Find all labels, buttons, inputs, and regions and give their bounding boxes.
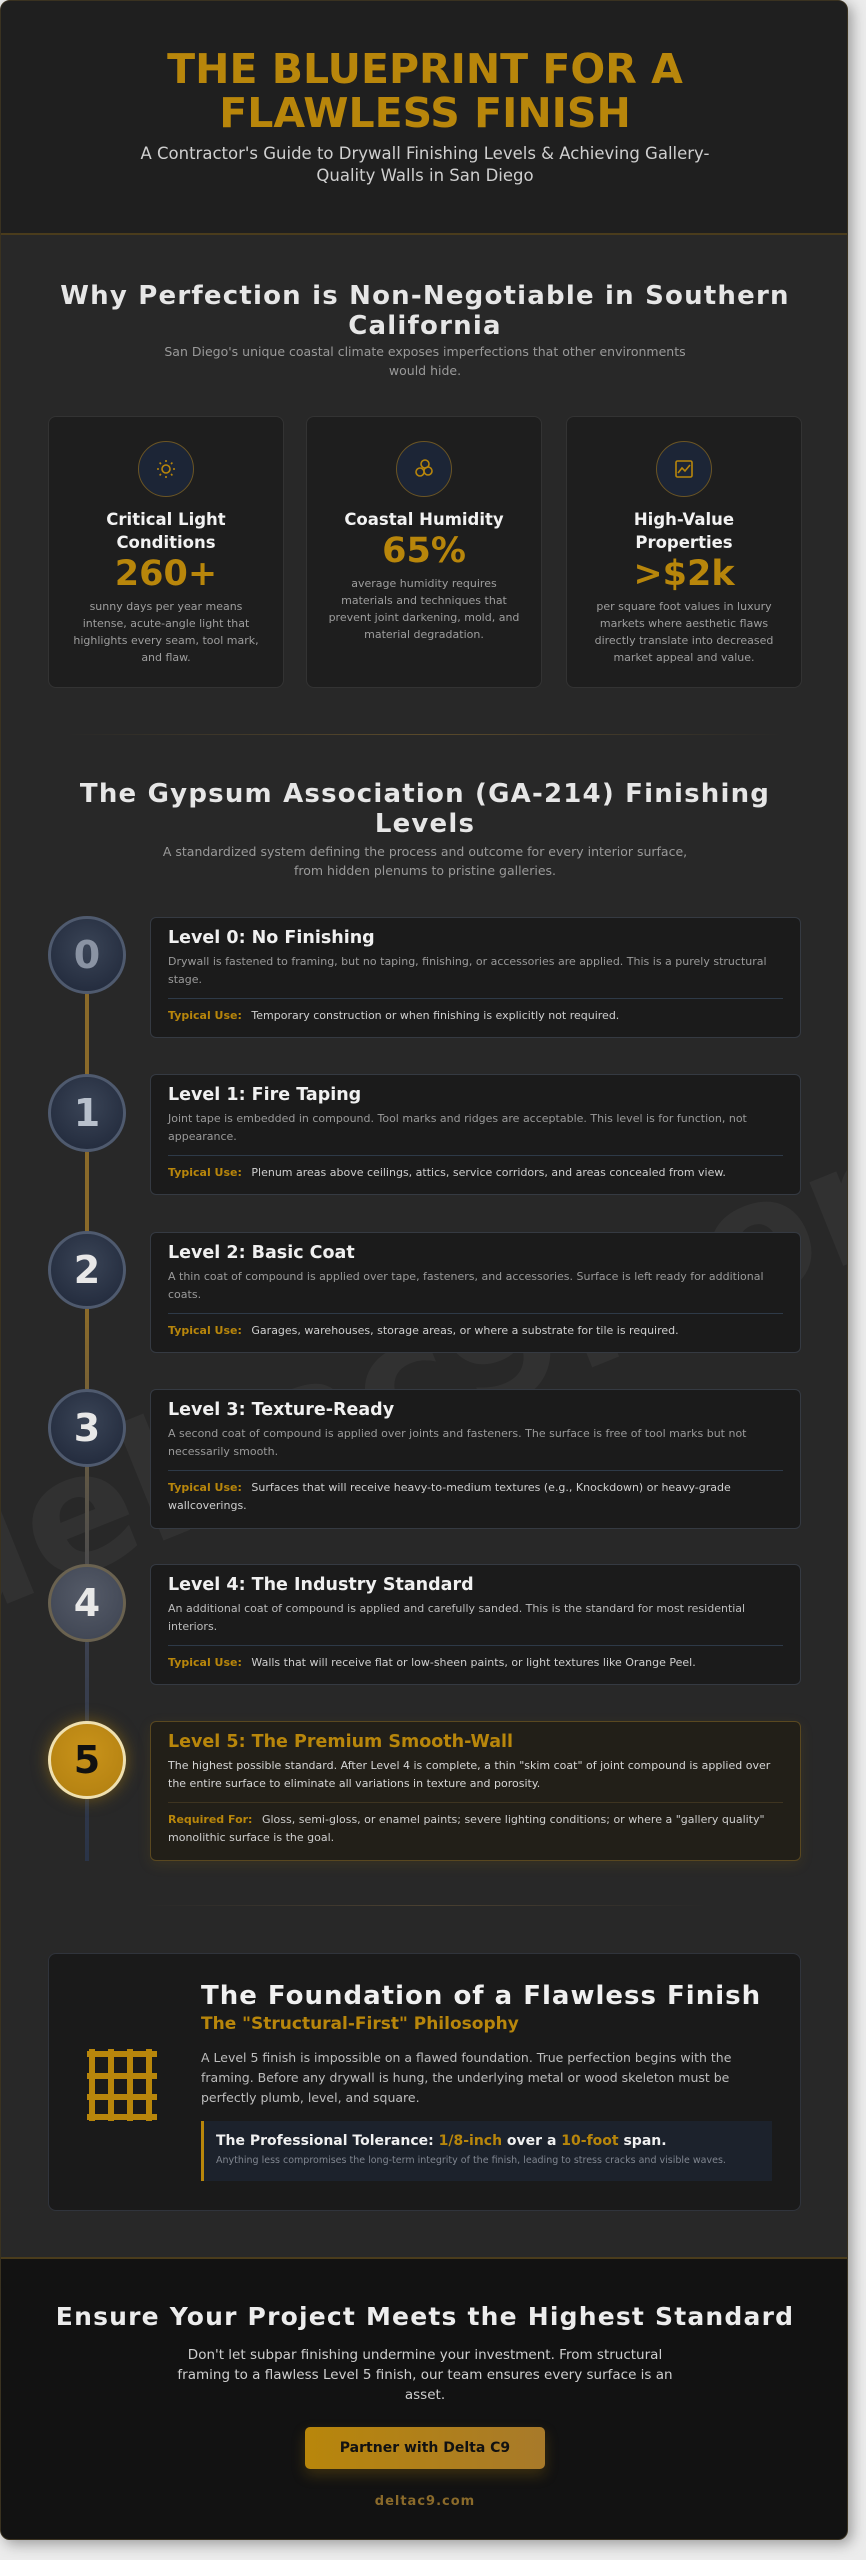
level 5 card: [150, 1721, 801, 1861]
heading: GA-214: The Gypsum Association (GA-214) Finishing Levels: [80, 779, 770, 839]
foundation subheading: The "Structural-First" Philosophy: [201, 2014, 519, 2034]
icon: chart: [656, 441, 712, 497]
level 0 marker: [48, 916, 126, 994]
level 4 card: Typical Use: Walls that will receive flat or low-sheen paints, or light textures like Orange Peel.: [168, 1656, 696, 1669]
card: high-value: [566, 416, 802, 688]
card: high-value: per square foot values in luxury markets where aesthetic flaws directly translate into decreased market appeal and value.: [595, 600, 773, 664]
CTA button: Partner with Delta C9: [340, 2440, 510, 2456]
level 2 marker: 2: [74, 1248, 100, 1292]
subtitle: A Contractor's Guide to Drywall Finishing Levels & Achieving Gallery-Quality Walls in San Diego: [140, 144, 710, 185]
foundation heading: The Foundation of a Flawless Finish: [201, 1981, 761, 2011]
CTA heading: Ensure Your Project Meets the Highest Standard: [56, 2302, 794, 2331]
card: critical light: Critical Light: [106, 510, 226, 529]
CTA text: Don't let subpar finishing undermine your investment. From structural framing to a flawless Level 5 finish, our team ensures every surface is an asset.: [177, 2347, 673, 2403]
card: humidity: Coastal Humidity: [344, 510, 504, 529]
heading: why perfection: Why Perfection is Non-Negotiable in Southern California: [60, 281, 790, 341]
card: high-value: Properties: [635, 533, 733, 552]
level 0 card: Drywall is fastened to framing, but no taping, finishing, or accessories are applied. This is a purely structural stage.: [168, 955, 767, 986]
level 2 card: [150, 1232, 801, 1353]
card: humidity: 65%: [382, 531, 466, 571]
CTA button: [305, 2427, 545, 2469]
level 5 card: The highest possible standard. After Level 4 is complete, a thin "skim coat" of joint compound is applied over the entire surface to eliminate all variations in texture and porosity.: [168, 1759, 770, 1790]
footer CTA: [1, 2257, 849, 2541]
level 1 marker: 1: [74, 1091, 100, 1135]
level 1 marker: [48, 1074, 126, 1152]
card: humidity: [306, 416, 542, 688]
icon: droplets: [396, 441, 452, 497]
lead text: A standardized system defining the process and outcome for every interior surface, from hidden plenums to pristine galleries.: [163, 844, 687, 878]
level 5 card: Level 5: The Premium Smooth-Wall: [168, 1732, 513, 1752]
tolerance callout: [201, 2121, 772, 2181]
card: critical light: 260+: [115, 554, 217, 594]
level 1 card: [150, 1074, 801, 1195]
level 3 marker: 3: [74, 1406, 100, 1450]
level 1 card: Level 1: Fire Taping: [168, 1085, 361, 1105]
level 5 marker: [48, 1721, 126, 1799]
card: high-value: >$2k: [633, 554, 735, 594]
level 0 card: [150, 917, 801, 1038]
level 2 marker: [48, 1231, 126, 1309]
level 4 card: Level 4: The Industry Standard: [168, 1575, 474, 1595]
level 0 card: Typical Use: Temporary construction or when finishing is explicitly not required.: [168, 1009, 619, 1022]
header: [1, 1, 849, 235]
card: humidity: average humidity requires materials and techniques that prevent joint darkening, mold, and material degradation.: [329, 577, 519, 641]
level 1 card: Typical Use: Plenum areas above ceilings, attics, service corridors, and areas concealed from view.: [168, 1166, 726, 1179]
level 3 card: Level 3: Texture-Ready: [168, 1400, 394, 1420]
tolerance callout: The Professional Tolerance: 1/8-inch over a 10-foot span.: [216, 2133, 667, 2149]
panel: foundation: [48, 1953, 801, 2211]
level 3 marker: [48, 1389, 126, 1467]
level 3 card: [150, 1389, 801, 1529]
level 4 card: [150, 1564, 801, 1685]
level 5 marker: 5: [74, 1738, 100, 1782]
level 5 card: Required For: Gloss, semi-gloss, or enamel paints; severe lighting conditions; or where a "gallery quality" monolithic surface is the goal.: [168, 1813, 765, 1844]
level 3 card: Typical Use: Surfaces that will receive heavy-to-medium textures (e.g., Knockdown) or heavy-grade wallcoverings.: [168, 1481, 731, 1512]
level 2 card: Typical Use: Garages, warehouses, storage areas, or where a substrate for tile is required.: [168, 1324, 679, 1337]
title: THE BLUEPRINT FOR A: [167, 45, 683, 93]
icon: sun: [138, 441, 194, 497]
level 1 card: Joint tape is embedded in compound. Tool marks and ridges are acceptable. This level is for function, not appearance.: [168, 1112, 747, 1143]
level 3 card: A second coat of compound is applied over joints and fasteners. The surface is free of tool marks but not necessarily smooth.: [168, 1427, 746, 1458]
level 4 card: An additional coat of compound is applied and carefully sanded. This is the standard for most residential interiors.: [168, 1602, 745, 1633]
level 2 card: Level 2: Basic Coat: [168, 1243, 355, 1263]
footer url: deltac9.com: [375, 2494, 475, 2509]
level 0 marker: 0: [74, 933, 100, 977]
level 4 marker: 4: [74, 1581, 100, 1625]
level 2 card: A thin coat of compound is applied over tape, fasteners, and accessories. Surface is left ready for additional coats.: [168, 1270, 764, 1301]
card: critical light: sunny days per year means intense, acute-angle light that highlights every seam, tool mark, and flaw.: [73, 600, 259, 664]
timeline line: [85, 955, 89, 1861]
lead text: San Diego's unique coastal climate exposes imperfections that other environments would hide.: [164, 344, 686, 378]
title: FLAWLESS FINISH: [219, 89, 631, 137]
icon: framing grid: [87, 2049, 157, 2121]
level 0 card: Level 0: No Finishing: [168, 928, 375, 948]
foundation text: A Level 5 finish is impossible on a flawed foundation. True perfection begins with the framing. Before any drywall is hung, the underlying metal or wood skeleton must be perfectly plumb, level, and square.: [201, 2050, 731, 2105]
level 4 marker: [48, 1564, 126, 1642]
card: high-value: High-Value: [634, 510, 734, 529]
card: critical light: [48, 416, 284, 688]
title: [167, 45, 683, 137]
card: critical light: Conditions: [116, 533, 216, 552]
tolerance callout: Anything less compromises the long-term integrity of the finish, leading to stress cracks and visible waves.: [216, 2155, 726, 2166]
